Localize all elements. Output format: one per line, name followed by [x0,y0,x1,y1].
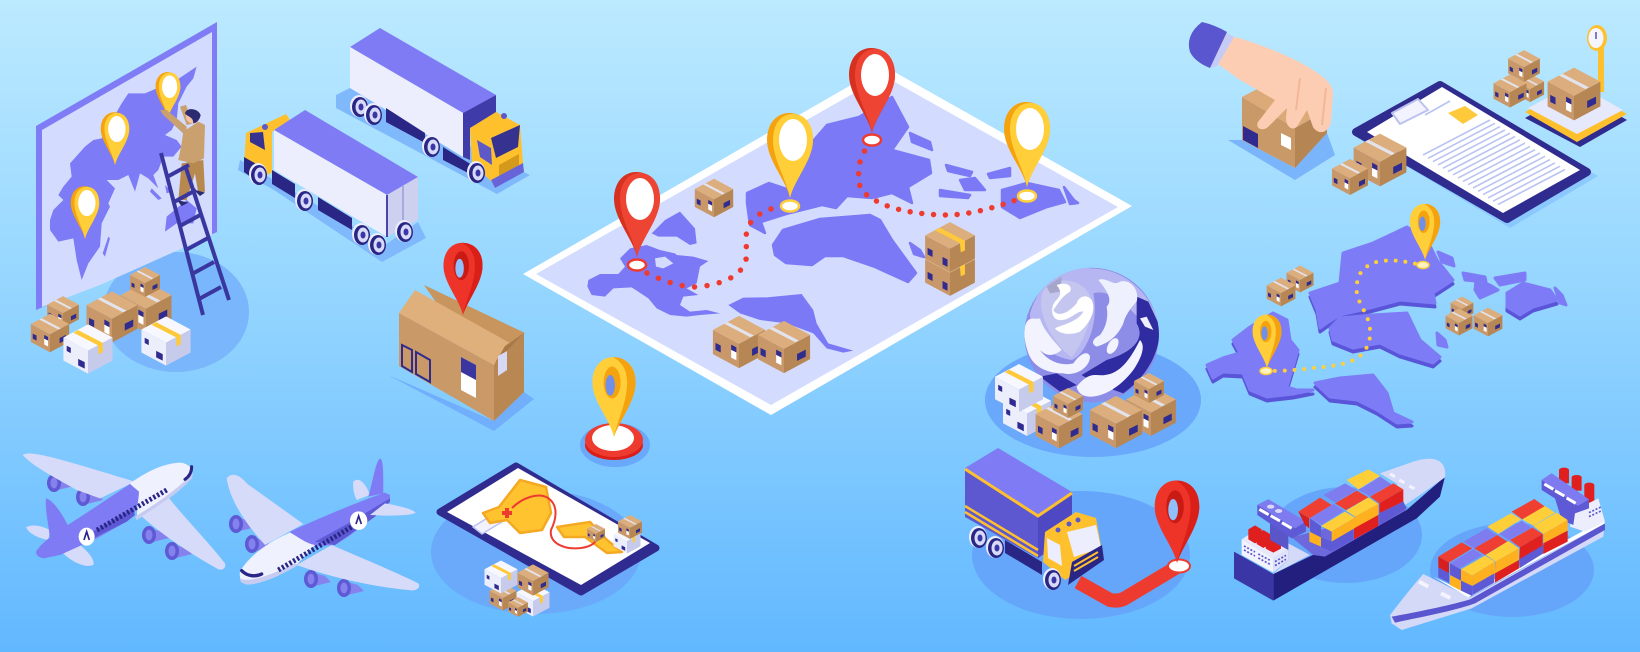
plane body and wings [23,453,225,570]
red route [512,496,596,548]
hull [1234,552,1273,601]
panel: globe with parcels [985,267,1201,457]
ladder [161,153,229,315]
red pin on box [443,243,483,315]
container stack [1438,499,1568,596]
map side thickness [1207,231,1557,427]
globe [1024,267,1160,402]
panel: airplane heading left [227,458,419,597]
engines behind wings [47,474,74,492]
front truck [238,110,426,262]
panel: wall map with worker on ladder [31,22,249,374]
pin bases [628,260,646,270]
bow details [1419,582,1450,598]
hand [1215,33,1333,132]
stern house [1242,532,1288,558]
panel: open cardboard box with red pin [388,243,534,431]
panel: main flat world map with route [523,48,1132,415]
shirt cuff [1210,33,1234,68]
panel: delivery truck with red route and pin [965,448,1199,619]
parcels on map [695,179,733,217]
clip [1392,99,1428,124]
parcels [587,524,605,542]
panel: parcel weighing scale [1494,25,1627,147]
text lines [1423,120,1565,204]
parcels [1516,74,1544,102]
wall pins [156,72,180,118]
small parcels [1286,266,1314,292]
red funnels [1248,525,1281,553]
red road [1078,567,1177,601]
dotted route [647,206,785,287]
bridge [1542,473,1589,525]
stacked parcels [47,296,79,328]
yellow note [1448,106,1478,124]
bow details [1390,474,1414,489]
panel: container ship with dark hull [1234,459,1445,601]
back truck [336,28,530,194]
panel: two semi trucks [238,28,530,262]
funnels [1559,468,1594,508]
cab [1043,512,1103,580]
panel: hand placing a parcel [1189,22,1335,180]
bow deck [1380,459,1445,505]
panel: airplane heading right [23,453,225,570]
deck plate [1292,508,1407,557]
container stack [1298,469,1407,552]
panel: clipboard document with parcels [1332,85,1598,228]
plane body and wings [227,458,419,590]
panel: tablet map with parcels [431,466,656,617]
wall map frame [36,22,217,310]
panel: container ship with light hull [1390,468,1605,630]
panel: raised world map with yellow route [1207,204,1566,427]
world map on wall [50,67,197,280]
yellow dotted route [1265,260,1423,371]
yellow map [483,480,622,553]
hull [1390,523,1605,630]
scale pole and dial [1598,40,1604,92]
map top surface [1207,227,1566,423]
bridge [1270,522,1288,550]
red pin [1155,481,1199,563]
map pins [614,172,660,257]
parcel [1242,97,1295,168]
panel: yellow pin on red base [580,357,650,467]
americas [587,212,853,353]
parcels around globe [1003,388,1051,436]
parcels [1354,134,1406,186]
yellow pins with holes [1410,204,1440,260]
ship house [1570,498,1605,532]
truck box [965,448,1072,515]
africa eurasia australia [747,97,1078,282]
engines behind wings [229,515,256,533]
worker [160,105,205,206]
